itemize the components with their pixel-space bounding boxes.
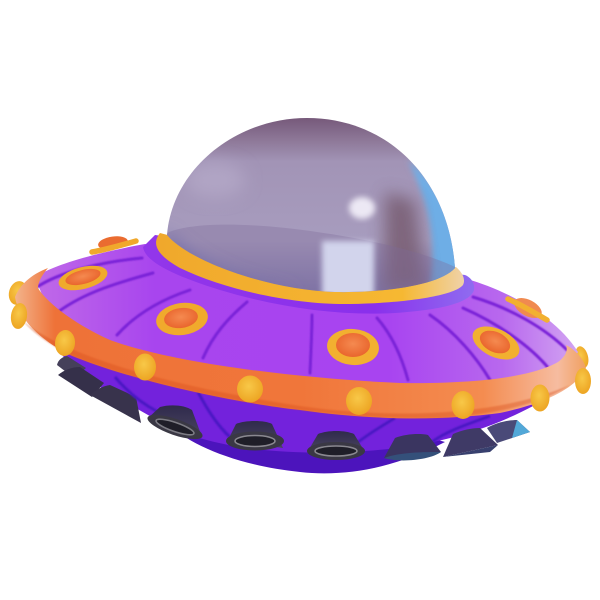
porthole: back right xyxy=(508,294,547,322)
engine: centre right xyxy=(307,431,365,460)
collar around dome xyxy=(143,235,474,314)
back porthole left xyxy=(92,234,136,252)
engine: centre xyxy=(226,421,284,450)
dome reflection: light blobs xyxy=(188,162,241,195)
porthole: centre xyxy=(326,327,380,367)
glass dome xyxy=(165,118,462,300)
engine: right 2 xyxy=(443,428,498,457)
gold dome ring xyxy=(156,233,464,304)
deck panel lines xyxy=(37,258,567,380)
engine: centre left xyxy=(145,405,205,444)
porthole: left xyxy=(154,300,210,338)
lower hull xyxy=(58,350,535,473)
engine: far left xyxy=(57,356,86,378)
dome lens: lower tint xyxy=(167,224,455,292)
porthole: right xyxy=(467,320,525,366)
dome reflection: dark band xyxy=(383,192,428,292)
underside panel seams xyxy=(115,377,490,447)
dome reflection: blue right edge xyxy=(408,162,455,282)
dome reflection: window xyxy=(322,241,374,297)
engine: right 3 xyxy=(487,420,530,443)
engine: left 2 xyxy=(58,367,104,397)
illustration: purple flying saucer xyxy=(8,118,591,474)
porthole: front left xyxy=(56,261,110,295)
gold studs on rim xyxy=(9,302,591,419)
rim: orange ring xyxy=(15,268,586,418)
dome reflection: highlight xyxy=(349,197,375,219)
engine: right 1 xyxy=(384,434,441,460)
dome reflection: lower-left blue xyxy=(167,232,256,280)
engine: left 3 xyxy=(90,385,141,423)
saucer top deck xyxy=(35,244,578,385)
back studs xyxy=(6,279,591,369)
